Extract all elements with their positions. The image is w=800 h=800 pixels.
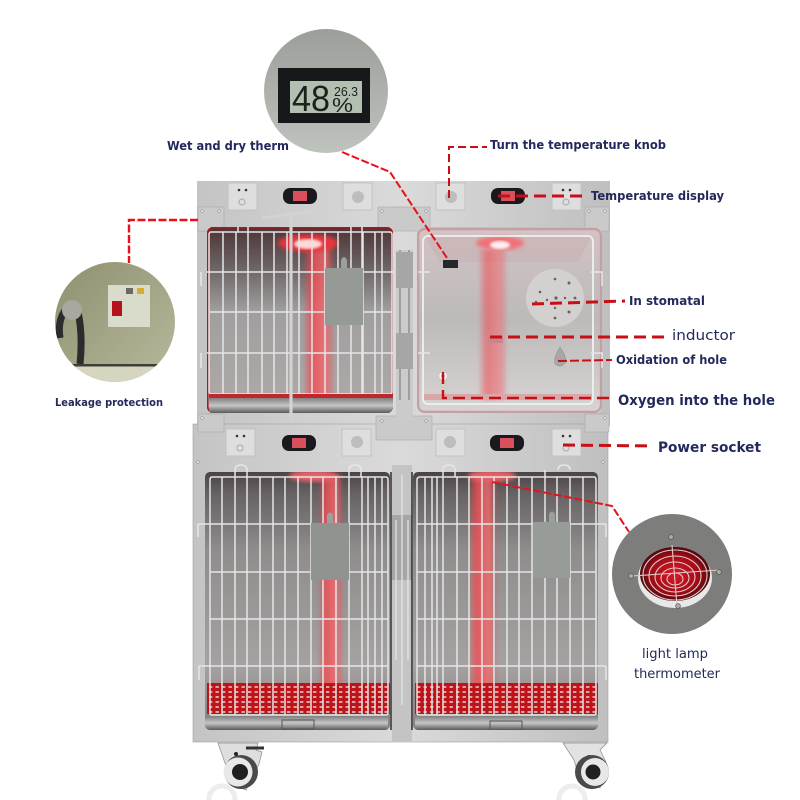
tag: lower left [311,512,349,580]
bottom mesh strip [424,394,592,400]
cage: lower left [205,470,390,730]
label: oxygen into the hole: Oxygen into the hole [618,393,775,409]
socket [228,183,257,210]
red mesh sliver [209,394,393,398]
caster: right [563,743,609,789]
red light beam [478,250,508,400]
centre post: lower [391,465,412,742]
control row: lower [226,429,581,456]
cage: lower right [413,470,598,730]
temperature display right [490,435,524,451]
leader: inductor [490,336,666,338]
photo inset: wet and dry thermometer [264,29,388,153]
label: oxidation of hole: Oxidation of hole [616,353,727,367]
knob plate [343,183,372,210]
temperature display [283,188,317,204]
lamp [468,470,516,482]
wire door: lower right [417,465,606,715]
leader: wet and dry therm [342,152,447,258]
drop tray [209,398,393,413]
wire door [201,220,393,394]
label: light lamp: light lamp [642,647,708,662]
breaker [108,285,150,327]
label: leakage protection: Leakage protection [55,396,163,409]
drop tray [415,716,598,730]
leader: power socket [563,445,653,446]
door handles right [418,272,602,368]
faint reflections under casters [209,786,585,800]
frame corner plates [198,207,609,440]
photo inset: light lamp [612,514,732,634]
leader: temperature display [498,194,588,198]
knob plate right [436,429,465,456]
upper frame [197,181,610,426]
label: wet and dry therm: Wet and dry therm [167,139,289,153]
drop tray [205,716,388,730]
red edge glow [207,227,393,413]
hygrometer device [278,68,370,123]
temperature display [282,435,316,451]
cage: upper left [201,220,393,413]
lamp [289,470,337,482]
temperature display right [491,188,525,204]
cabinet [193,181,610,800]
leader: in stomatal [532,301,625,304]
leader: temperature knob [449,147,487,198]
centre post: upper [396,250,413,420]
lower frame [193,424,608,742]
tag: lower right [533,512,570,578]
leader: light lamp [492,482,629,532]
oxygen hole ring [440,373,446,379]
label: turn the temperature knob: Turn the temperature knob [490,138,666,152]
hygrometer device: 48 [292,78,330,119]
leader: oxygen into the hole [443,372,612,398]
hygrometer device: % [332,95,353,117]
knob plate [342,429,371,456]
hygrometer sensor [443,260,458,268]
hygrometer device: 26.3 [334,84,358,99]
cage: upper right [417,227,602,413]
red light beam [468,474,498,699]
rivets [197,210,606,463]
tag [325,257,363,325]
label: inductor: inductor [672,328,735,344]
inductor block [488,336,503,343]
socket right [552,429,581,456]
wire door: lower left [198,465,388,715]
socket [226,429,255,456]
label: in stomatal: In stomatal [629,294,705,308]
label: temperature display: Temperature display [591,189,724,203]
lamp [278,234,338,252]
mesh floor [207,683,390,714]
leader: leakage protection [129,220,198,263]
back panel shading [424,236,592,262]
caster: left [218,743,264,790]
door handles: upper left [200,272,202,368]
red light beam [318,474,344,694]
leader: oxidation of hole [558,360,612,361]
mesh floor [415,683,598,714]
red light beam [303,246,334,394]
porous disc: in stomatal [526,269,584,327]
control row: upper [228,183,581,210]
lamp [476,236,524,250]
latch bar [262,210,322,420]
acrylic door edge [423,236,593,404]
oxidation hole [555,347,566,366]
photo inset: leakage protection [55,262,175,384]
knob plate right [436,183,465,210]
label: thermometer: thermometer [634,667,721,682]
label: power socket: Power socket [658,440,761,456]
socket right [552,183,581,210]
